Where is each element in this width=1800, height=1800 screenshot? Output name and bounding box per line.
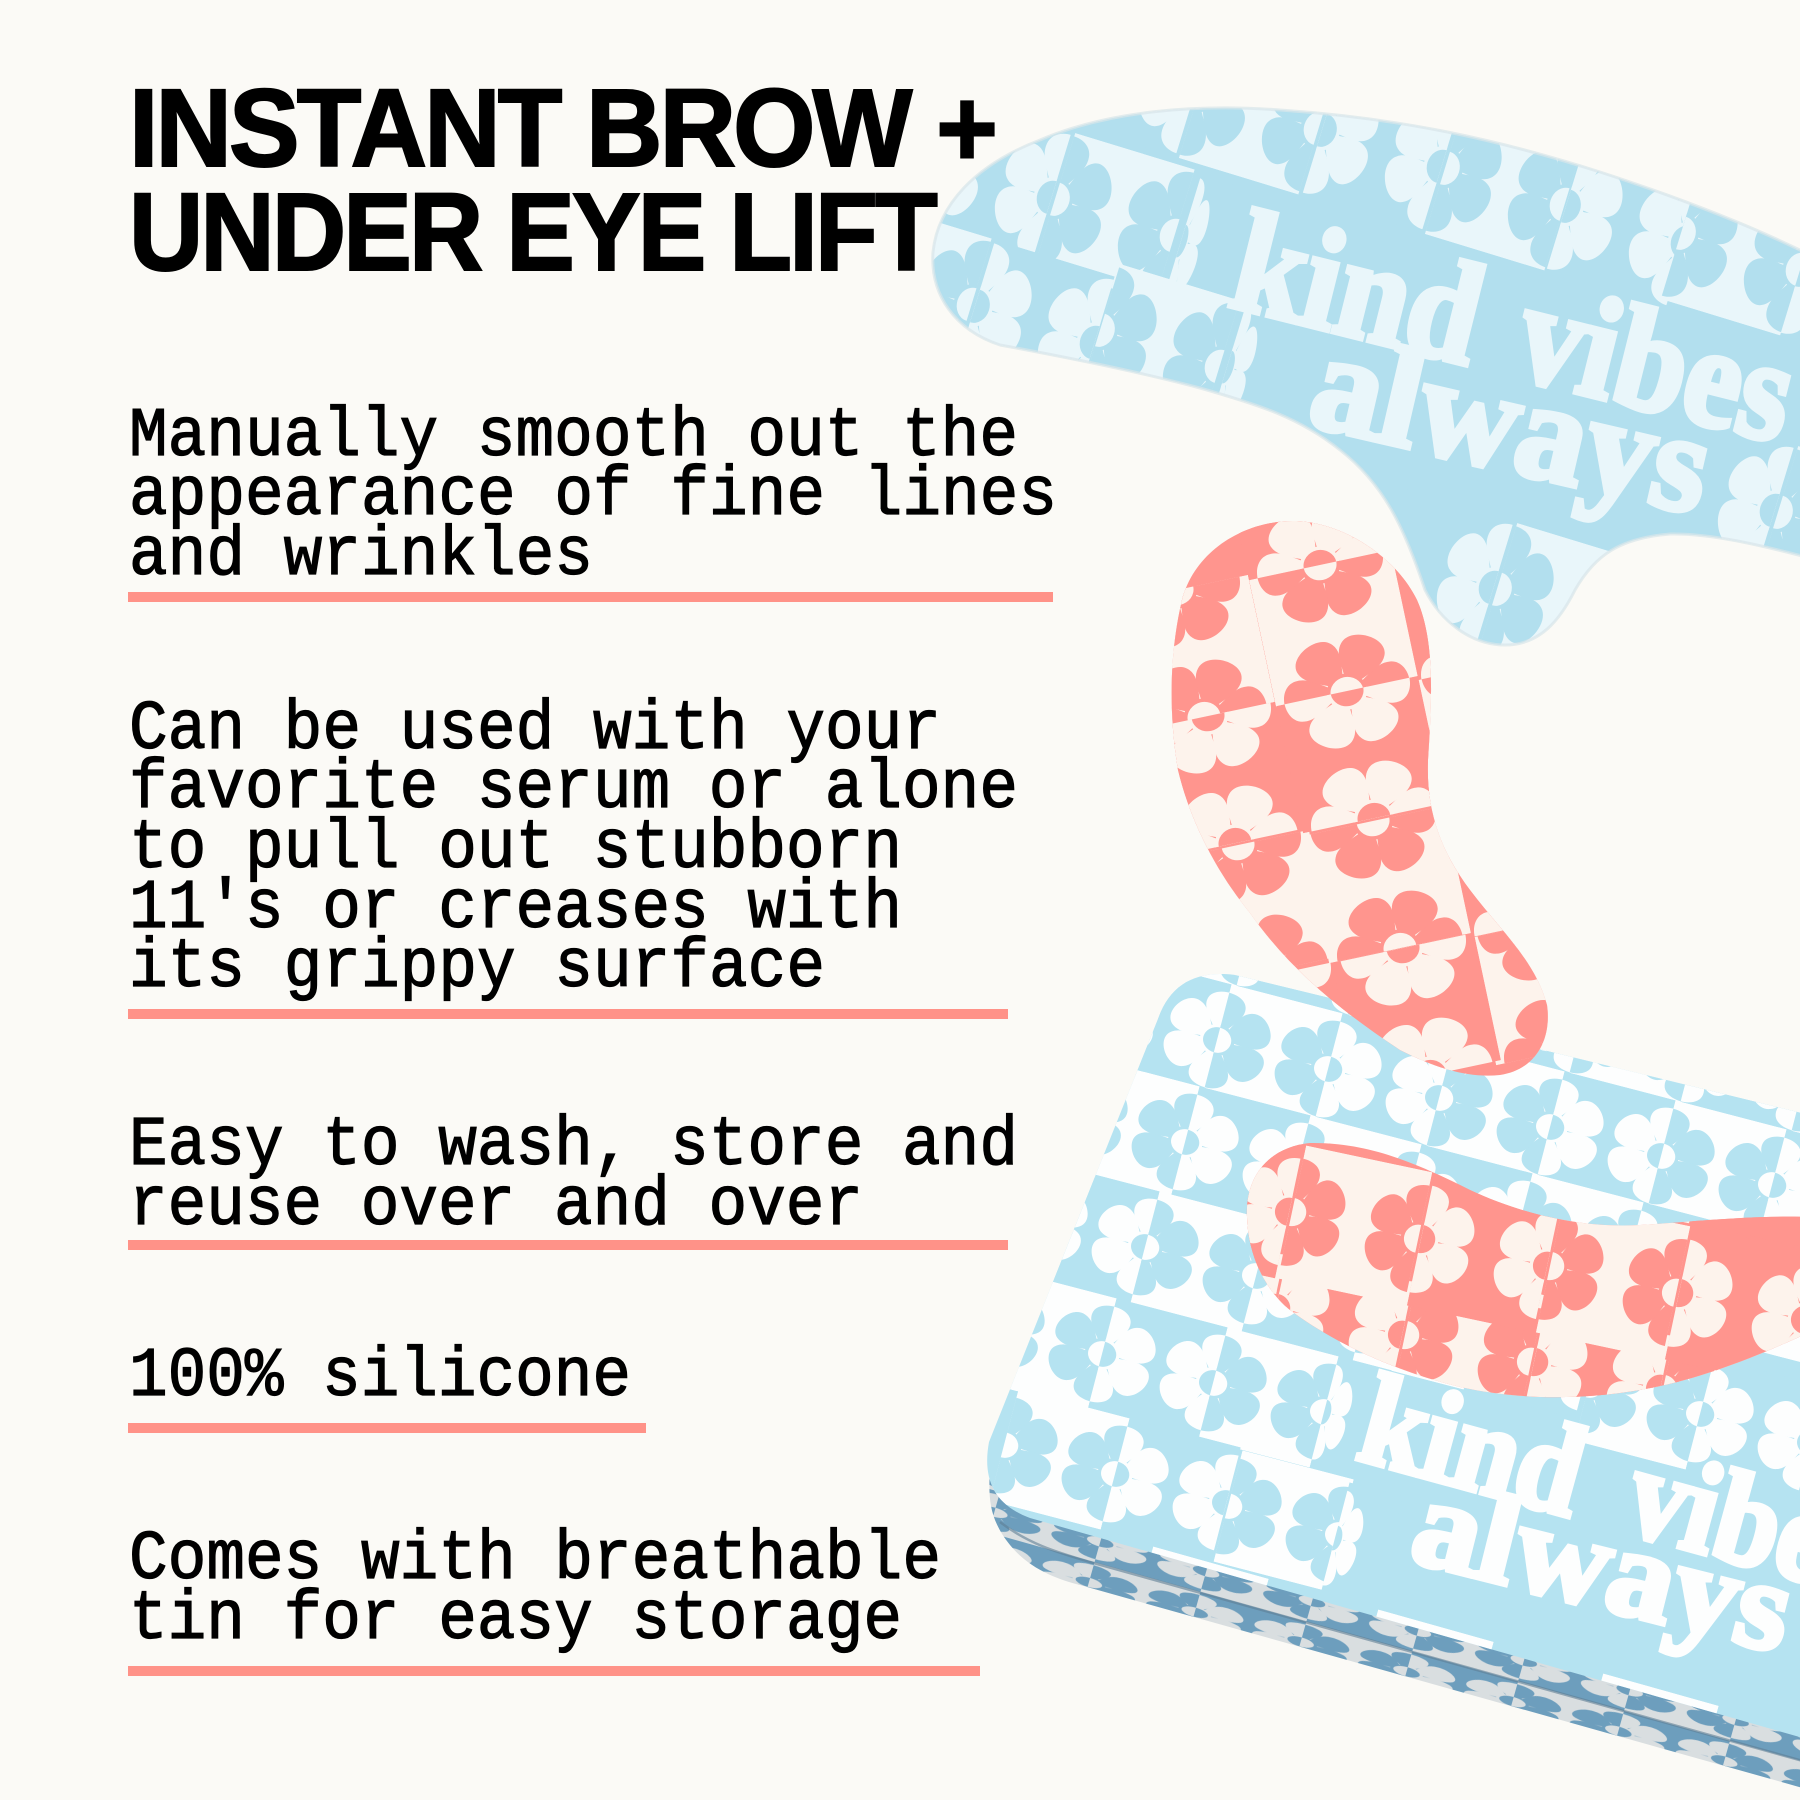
benefit: grippy surface — [128, 691, 1018, 1019]
pink eye patch — [1172, 521, 1548, 1076]
benefit: fine lines: and wrinkles — [129, 517, 593, 596]
benefit: storage tin — [128, 1521, 980, 1676]
benefit: storage tin: Comes with breathable — [129, 1521, 941, 1600]
benefit: reusable: Easy to wash, store and — [129, 1107, 1018, 1186]
benefit: grippy surface: Can be used with your — [129, 691, 941, 770]
title: INSTANT BROW + — [129, 67, 995, 190]
benefit: grippy surface: favorite serum or alone — [129, 750, 1018, 829]
blue brow patch — [932, 108, 1800, 645]
under-eye patch on tin — [1246, 1143, 1800, 1398]
title — [129, 67, 995, 294]
benefit: storage tin: tin for easy storage — [129, 1581, 902, 1660]
brow patch: glossy edge — [933, 108, 1800, 645]
benefit: grippy surface: 11's or creases with — [129, 870, 902, 949]
benefit: fine lines: Manually smooth out the — [129, 398, 1018, 477]
benefit: reusable: reuse over and over — [129, 1167, 863, 1246]
benefit: silicone: 100% silicone — [129, 1338, 631, 1417]
benefit: grippy surface: its grippy surface — [129, 929, 825, 1008]
title: UNDER EYE LIFT — [129, 171, 938, 294]
benefit: reusable — [128, 1107, 1018, 1250]
benefit: fine lines — [128, 398, 1057, 602]
benefit: fine lines: appearance of fine lines — [129, 457, 1057, 536]
benefit: grippy surface: to pull out stubborn — [129, 810, 902, 889]
tin: top face — [987, 974, 1800, 1737]
brow patch: kind vibes always lettering: always — [1298, 303, 1726, 545]
brow patch: kind vibes always lettering: kind vibes — [1218, 180, 1800, 474]
tin: side edge — [989, 1470, 1800, 1790]
tin: kind vibes always lettering: always — [1400, 1451, 1800, 1680]
